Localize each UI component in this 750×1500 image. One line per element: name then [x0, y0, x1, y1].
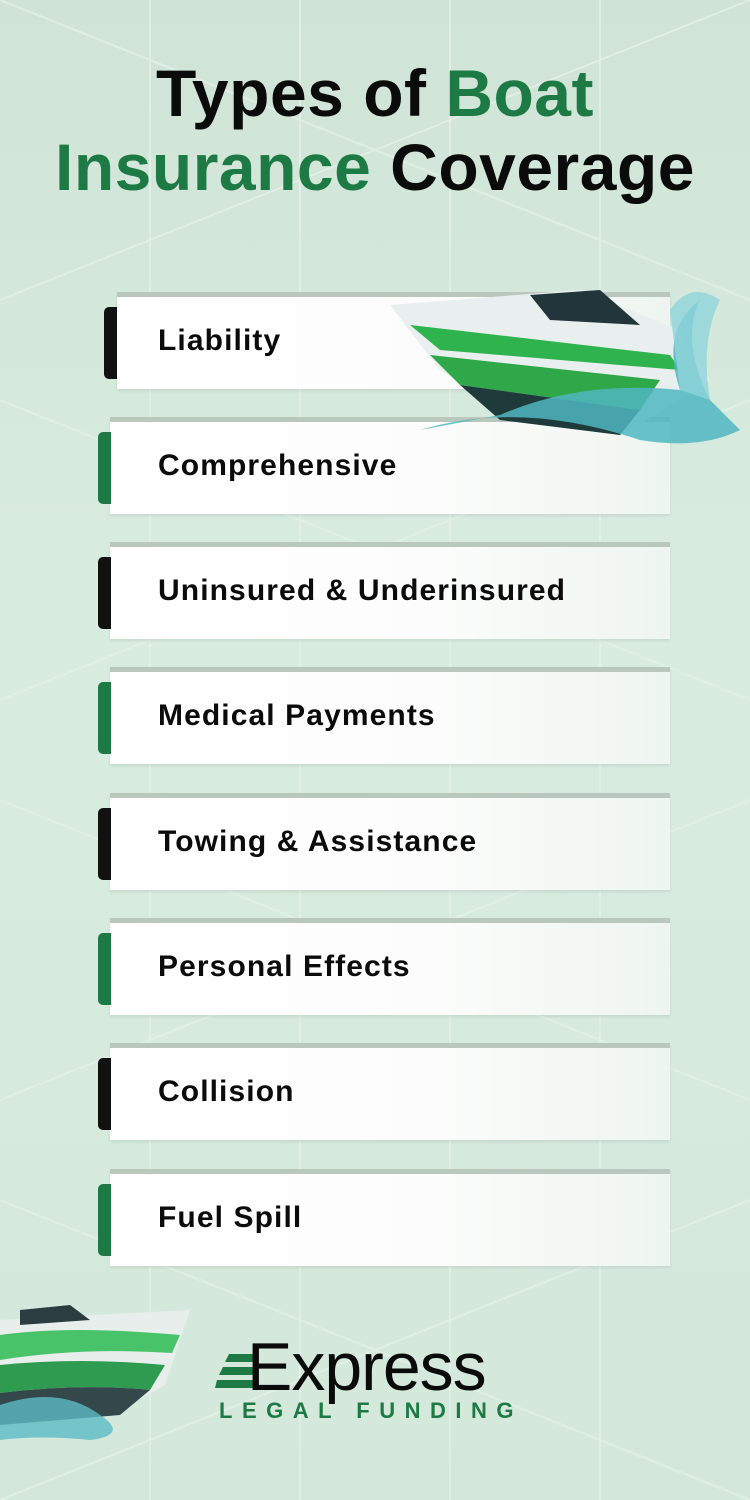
- logo: Express Legal Funding: LEGAL FUNDING: [219, 1398, 523, 1423]
- card: Uninsured & Underinsured: Uninsured & Underinsured: [158, 574, 566, 607]
- card: Collision: Collision: [158, 1075, 295, 1108]
- card: Personal Effects: Personal Effects: [158, 950, 411, 983]
- icon: boat bottom left: [0, 1305, 190, 1440]
- card: Collision: [110, 1043, 670, 1140]
- title: [55, 56, 695, 204]
- card: Uninsured & Underinsured: [110, 542, 670, 639]
- logo: Express Legal Funding: Express: [247, 1329, 486, 1405]
- card: Medical Payments: [110, 667, 670, 764]
- card: Towing & Assistance: [110, 793, 670, 890]
- card: Comprehensive: Comprehensive: [158, 449, 397, 482]
- card: Comprehensive: [110, 417, 670, 514]
- title: Insurance Coverage: [55, 130, 695, 204]
- card: Personal Effects: [110, 918, 670, 1015]
- card: Fuel Spill: Fuel Spill: [158, 1201, 302, 1234]
- icon: boat top right: [390, 290, 740, 444]
- card: Liability: Liability: [158, 324, 281, 357]
- logo mark: [215, 1354, 259, 1388]
- card: Towing & Assistance: Towing & Assistance: [158, 825, 477, 858]
- title: Types of Boat: [156, 56, 594, 130]
- card: Fuel Spill: [110, 1169, 670, 1266]
- card: Medical Payments: Medical Payments: [158, 699, 436, 732]
- logo: Express Legal Funding: [215, 1329, 523, 1423]
- card: Liability: [117, 292, 670, 389]
